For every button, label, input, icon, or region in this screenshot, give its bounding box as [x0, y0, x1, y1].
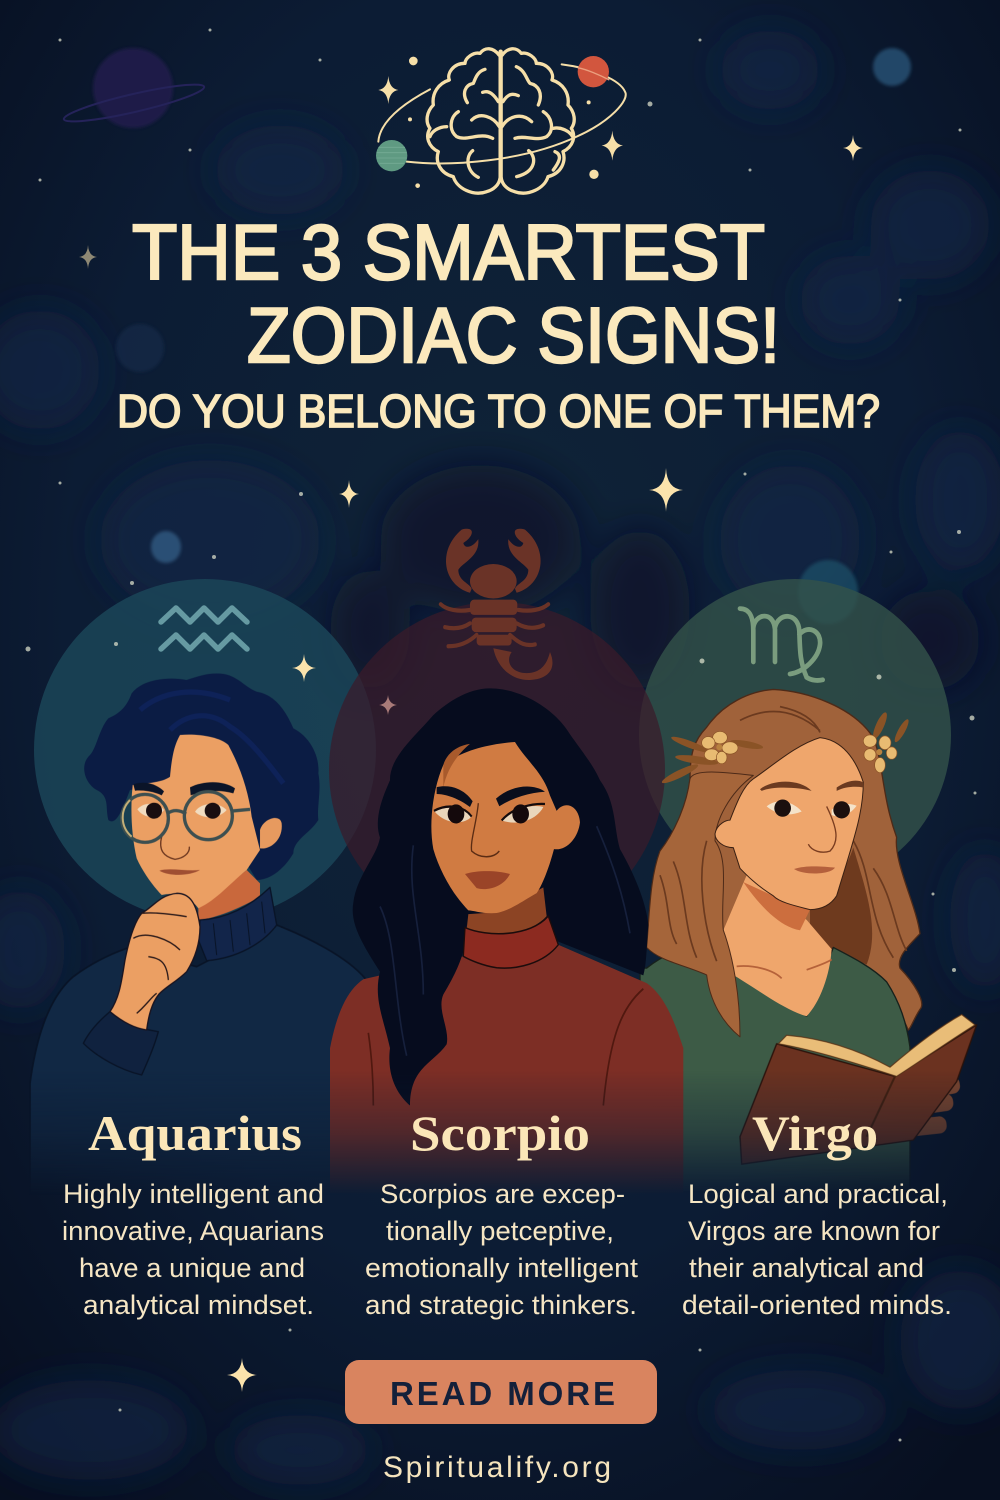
- footer: website: Spiritualify.org: [383, 1451, 611, 1484]
- title: [132, 208, 780, 379]
- virgo book: [740, 1025, 977, 1164]
- virgo flowers: [660, 711, 911, 786]
- subtitle: DO YOU BELONG TO ONE OF THEM?: [117, 385, 880, 437]
- scorpio hair: [353, 688, 648, 1106]
- sparkle stars: [79, 135, 863, 1392]
- title: ZODIAC SIGNS!: [247, 291, 780, 379]
- halo: aquarius: [34, 579, 376, 921]
- virgo hand: [917, 1079, 960, 1136]
- character: aquarius: [30, 673, 365, 1200]
- aquarius turtleneck: [198, 887, 277, 961]
- virgo face: [715, 738, 863, 910]
- aquarius description: have a unique and: [79, 1253, 305, 1283]
- aquarius ear: [260, 818, 282, 848]
- scorpio description: emotionally intelligent: [365, 1253, 639, 1283]
- icon: brain with orbiting planets: [376, 49, 626, 193]
- aquarius glasses: [122, 792, 250, 842]
- virgo front hair lock: [647, 772, 753, 1037]
- panel: aquarius text: [62, 1105, 324, 1320]
- halo: virgo: [639, 579, 951, 891]
- scorpio description: tionally petceptive,: [386, 1216, 614, 1246]
- virgo description: detail-oriented minds.: [682, 1290, 952, 1320]
- virgo shirt: [640, 942, 910, 1192]
- virgo neck and chest: [723, 875, 832, 1016]
- scorpio description: Scorpios are excep-: [380, 1179, 625, 1209]
- title: THE 3 SMARTEST: [132, 208, 765, 296]
- scorpio face: [431, 742, 580, 913]
- characters fading into background: [30, 673, 977, 1200]
- aquarius cuff: [83, 1012, 158, 1075]
- virgo name: Virgo: [752, 1105, 878, 1161]
- button: read more: READ MORE: [390, 1375, 615, 1412]
- character: virgo: [640, 689, 977, 1192]
- virgo description: Virgos are known for: [688, 1216, 940, 1246]
- halo: scorpio: [329, 602, 665, 938]
- virgo nose and mouth: [808, 806, 836, 852]
- virgo eyes: [767, 802, 857, 816]
- aquarius neck: [198, 870, 260, 920]
- scorpio description: [365, 1179, 639, 1320]
- background planets: [62, 48, 911, 624]
- aquarius face: [131, 735, 260, 908]
- scorpio nose and mouth: [471, 803, 499, 857]
- aquarius description: Highly intelligent and: [63, 1179, 324, 1209]
- scorpio eyes: [434, 806, 543, 823]
- virgo description: Logical and practical,: [688, 1179, 948, 1209]
- scorpio neck: [467, 887, 547, 936]
- aquarius description: [62, 1179, 324, 1320]
- character: scorpio: [330, 688, 683, 1194]
- virgo brows: [760, 781, 863, 791]
- aquarius hair: [84, 673, 319, 880]
- aquarius sweater: [30, 925, 365, 1200]
- icon: virgo symbol: [740, 609, 823, 680]
- virgo description: their analytical and: [689, 1253, 924, 1283]
- scorpio sweater: [330, 945, 683, 1194]
- aquarius hand: [110, 893, 200, 1030]
- virgo description: [682, 1179, 952, 1320]
- icon: scorpion: [441, 529, 552, 680]
- virgo back hair: [647, 689, 922, 1030]
- panel: scorpio text: [365, 1105, 639, 1320]
- aquarius description: analytical mindset.: [83, 1290, 314, 1320]
- aquarius name: Aquarius: [88, 1105, 302, 1161]
- virgo hair shadow: [810, 848, 872, 965]
- scorpio name: Scorpio: [410, 1105, 590, 1161]
- aquarius brows: [133, 782, 235, 795]
- scorpio brows: [437, 786, 545, 807]
- scorpio description: and strategic thinkers.: [365, 1290, 637, 1320]
- aquarius nose and mouth: [161, 837, 189, 859]
- scorpio collar: [463, 916, 558, 968]
- panel: virgo text: [682, 1105, 952, 1320]
- aquarius eyes: [137, 804, 227, 817]
- icon: aquarius symbol: [161, 608, 247, 649]
- button: read more: [345, 1360, 657, 1424]
- scorpio forehead shadow: [443, 744, 470, 788]
- aquarius description: innovative, Aquarians: [62, 1216, 324, 1246]
